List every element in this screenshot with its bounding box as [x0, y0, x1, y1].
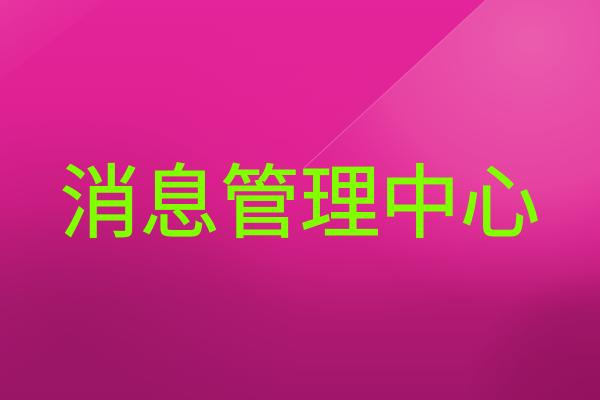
title: 消息管理中心 [60, 159, 540, 248]
